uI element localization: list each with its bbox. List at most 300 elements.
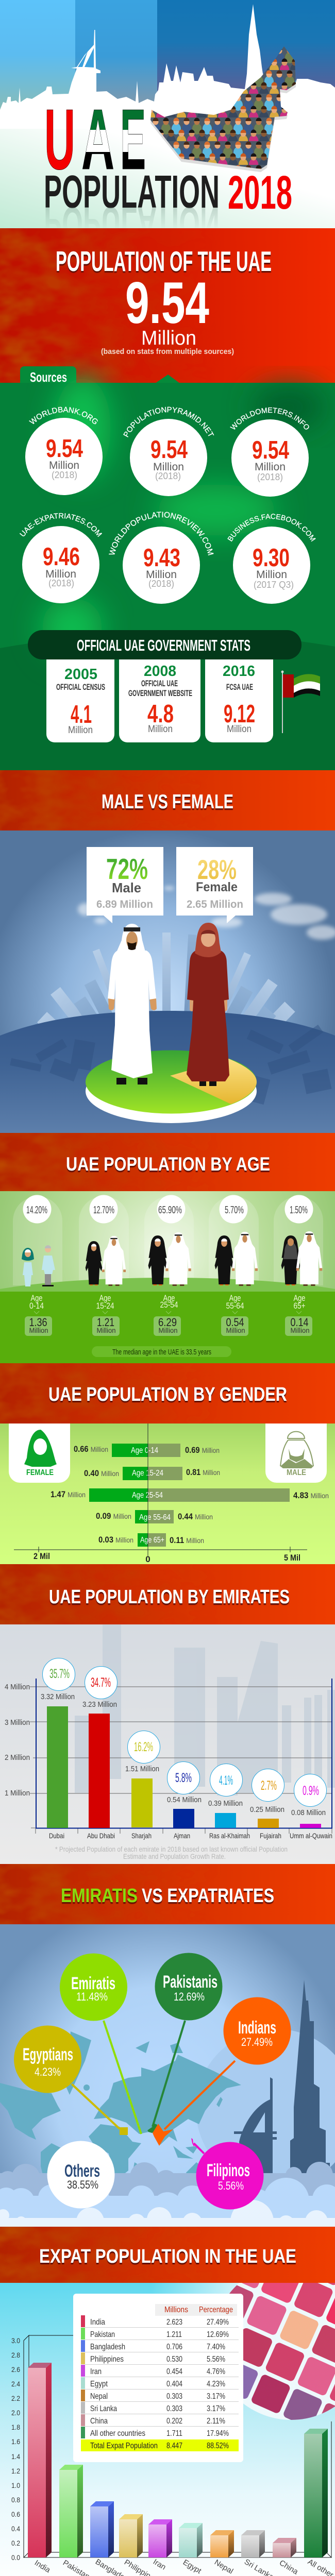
people: 65+: [281, 1231, 322, 1286]
male values: 4.83 Million: [293, 1490, 329, 1500]
sky colour columns: [0, 0, 335, 110]
sources label: Sources: [30, 369, 67, 385]
source populationpyramid.net: 9.54: [150, 436, 188, 464]
table text: 17.94%: [207, 2429, 229, 2438]
age 25-54: 6.29: [158, 1316, 177, 1329]
hero banner: E: [120, 92, 146, 188]
value labels: 0.25 Million: [250, 1806, 284, 1814]
source worldometers.info: 9.54: [252, 436, 289, 464]
card 2005: Million: [68, 725, 93, 736]
percent labels: 5.8%: [175, 1771, 192, 1785]
female values: 1.47 Million: [51, 1489, 86, 1499]
icon: UAE flag: [281, 671, 320, 733]
title: POPULATION 2018: 2018: [228, 166, 292, 219]
female values: 0.09 Million: [96, 1511, 131, 1521]
source uae-expatriates.com: [20, 513, 102, 603]
source worldpopulationreview.com: (2018): [148, 579, 174, 589]
age 25-54: Age: [163, 1293, 175, 1303]
table text: Egypt: [90, 2380, 108, 2388]
value labels: [41, 1693, 326, 1817]
header: population by gender: [0, 1363, 335, 1423]
sources tab: [20, 366, 76, 384]
source business.facebook.com: (2017 Q3): [254, 580, 294, 590]
note: (based on stats from multiple sources): [101, 347, 234, 356]
male values: 0.81 Million: [186, 1467, 220, 1477]
bubble: Emiratis: 11.48%: [76, 1990, 108, 2003]
age 15-24: [92, 1293, 120, 1336]
table text: 27.49%: [207, 2318, 229, 2327]
percent bubbles: 14.20%: [26, 1205, 47, 1216]
footnote: [55, 1845, 288, 1860]
age 55-64: [221, 1293, 248, 1336]
percent labels: 0.9%: [303, 1784, 319, 1798]
table text: 0.404: [166, 2380, 182, 2388]
x-axis labels: India: [33, 2558, 52, 2575]
age 55-64: Million: [226, 1326, 245, 1334]
table text: 12.69%: [207, 2330, 229, 2339]
axis labels: 2 Mil: [34, 1551, 50, 1561]
emirate names: Ras al-Khaimah: [209, 1832, 250, 1840]
pointer: [155, 375, 180, 383]
callout: female: [176, 847, 253, 923]
axis labels: 5 Mil: [284, 1553, 300, 1563]
source uae-expatriates.com: Million: [45, 568, 76, 580]
population pyramid bars: [89, 1444, 290, 1547]
source business.facebook.com: BUSINESS.FACEBOOK.COM: [227, 514, 316, 542]
panel: expat population: [0, 2283, 335, 2576]
age 15-24: Million: [97, 1326, 115, 1334]
header: population by emirates: [0, 1564, 335, 1624]
y-axis labels: 1.8: [11, 2423, 20, 2431]
y-axis labels: 3.0: [11, 2336, 20, 2345]
bubble: Others: [47, 2141, 114, 2208]
age 65+: 65+: [294, 1301, 306, 1311]
female values: [51, 1444, 133, 1545]
panel: total population: [0, 228, 335, 383]
y-axis labels: 2.4: [11, 2380, 20, 2388]
emirate names: Dubai: [49, 1832, 64, 1840]
bubble: Egyptians: 4.23%: [35, 2065, 61, 2078]
table text: 2.623: [166, 2318, 182, 2327]
female card: FEMALE: [26, 1468, 54, 1477]
percent bubbles: 1.50%: [290, 1205, 308, 1216]
axis labels: [34, 1551, 300, 1564]
card 2008: [119, 659, 200, 742]
panel: population by gender: [0, 1423, 335, 1564]
percent bubbles: 5.70%: [225, 1205, 244, 1216]
male values: 0.11 Million: [170, 1535, 204, 1545]
y-axis labels: [5, 1683, 30, 1798]
header: population by age: [0, 1133, 335, 1191]
world map: [0, 2031, 241, 2200]
green background: [0, 376, 335, 770]
table text: 5.56%: [207, 2355, 225, 2364]
source populationpyramid.net: (2018): [155, 471, 181, 481]
y-axis labels: 1.0: [11, 2481, 20, 2489]
source worldpopulationreview.com: WORLDPOPULATIONREVIEW.COM: [109, 512, 213, 555]
unit: Million: [141, 327, 196, 349]
table text: 0.530: [166, 2355, 182, 2364]
callout: male: Male: [112, 880, 141, 895]
age 65+: [285, 1293, 312, 1336]
bubble: Filipinos: 5.56%: [218, 2179, 244, 2192]
card 2008: 4.8: [147, 700, 174, 728]
y-axis labels: 2 Million: [5, 1754, 30, 1762]
age labels on bars: Age 0-14: [131, 1446, 158, 1455]
3D bar Egypt: [179, 2523, 203, 2557]
card 2005: 2005: [64, 666, 97, 683]
bubble: Emiratis: [60, 1954, 127, 2021]
3D bar Philippines: [119, 2514, 143, 2557]
table text: 3.17%: [207, 2404, 225, 2413]
card 2016: Million: [227, 724, 252, 735]
source populationpyramid.net: Million: [153, 461, 184, 473]
age 0-14: 1.36: [29, 1316, 47, 1329]
callout: female: 28%: [197, 855, 237, 885]
panel: sources: [0, 357, 335, 770]
age 65+: Age: [294, 1293, 305, 1303]
age 15-24: Age: [99, 1293, 111, 1303]
header: emiratis vs expatriates: [0, 1864, 335, 1924]
y-axis labels: 0.8: [11, 2496, 20, 2504]
highlighted countries: [120, 2124, 195, 2146]
y-axis labels: 0.2: [11, 2539, 20, 2547]
axis labels: 0: [145, 1554, 150, 1564]
percent bubbles: 65.90%: [158, 1205, 182, 1216]
age 0-14: Million: [29, 1326, 48, 1334]
percent labels: 4.1%: [219, 1773, 233, 1788]
value labels: 1.51 Million: [125, 1765, 159, 1773]
card 2016: [205, 659, 273, 742]
table swatches: [81, 2315, 85, 2438]
table card: [73, 2294, 243, 2462]
table text: 88.52%: [207, 2442, 229, 2450]
source business.facebook.com: [227, 514, 316, 604]
source worldbank.org: Million: [49, 460, 79, 471]
source uae-expatriates.com: UAE-EXPATRIATES.COM: [20, 513, 102, 537]
people: 55-64: [215, 1232, 258, 1286]
header: population by age: UAE POPULATION BY AGE: [66, 1154, 270, 1175]
bubble: Egyptians: [14, 2026, 81, 2093]
government stats heading: [28, 630, 301, 659]
age labels on bars: [131, 1446, 171, 1545]
source worldpopulationreview.com: Million: [146, 569, 177, 581]
table text: 7.40%: [207, 2343, 225, 2351]
table text: 1.211: [166, 2330, 182, 2339]
percent labels: 16.2%: [134, 1740, 153, 1754]
source business.facebook.com: Million: [256, 569, 287, 581]
source worldometers.info: [230, 407, 309, 497]
female values: 0.40 Million: [84, 1468, 119, 1478]
age 25-54: Million: [159, 1326, 177, 1334]
callout: male: 72%: [106, 853, 148, 886]
percent bubbles: [23, 1195, 313, 1223]
age 0-14: 0-14: [29, 1301, 44, 1311]
chart box lines: [24, 2335, 331, 2557]
percent labels: 2.7%: [261, 1778, 277, 1793]
table text: 1.711: [166, 2429, 182, 2438]
people: 15-24: [86, 1236, 126, 1286]
age 25-54: 25-54: [160, 1300, 178, 1310]
source uae-expatriates.com: 9.46: [43, 543, 80, 571]
green data band: [0, 1292, 335, 1363]
table text: Sri Lanka: [90, 2404, 117, 2413]
axis: [14, 1423, 307, 1556]
source worldbank.org: WORLDBANK.ORG: [29, 407, 98, 425]
table header: [155, 2304, 237, 2316]
bubble: Others: Others: [64, 2161, 100, 2181]
y-axis labels: 1 Million: [5, 1789, 30, 1798]
footnote: Estimate and Population Growth Rate.: [123, 1852, 226, 1860]
callout: male: 6.89 Million: [96, 899, 153, 910]
male card: [265, 1423, 327, 1483]
people: 25-54: [148, 1232, 191, 1286]
female values: 0.03 Million: [98, 1535, 133, 1545]
age 65+: 0.14: [291, 1316, 308, 1329]
age labels on bars: Age 55-64: [139, 1513, 171, 1522]
source uae-expatriates.com: (2018): [48, 578, 74, 588]
bubble: Indians: 27.49%: [241, 2036, 273, 2048]
panel: male vs female: [0, 831, 335, 1141]
value labels: 3.23 Million: [82, 1701, 117, 1709]
table text: 0.303: [166, 2392, 182, 2401]
value labels: 0.54 Million: [167, 1796, 202, 1804]
card 2016: 9.12: [224, 700, 255, 728]
y-axis labels: 0.0: [11, 2553, 20, 2562]
y-axis labels: 2.2: [11, 2394, 20, 2402]
title: UAE: U: [44, 92, 75, 188]
people: children: [22, 1245, 55, 1286]
age 15-24: 15-24: [96, 1301, 114, 1311]
age 55-64: 0.54: [226, 1316, 244, 1329]
clouds front: [0, 2200, 335, 2243]
ground: [0, 1278, 335, 1292]
mint floor gradient: [0, 129, 335, 228]
table text: All other countries: [90, 2429, 145, 2438]
table header: Millions: [164, 2306, 188, 2314]
3D bar Iran: [148, 2519, 172, 2557]
source worldometers.info: Million: [255, 461, 286, 473]
median age note: [92, 1346, 231, 1357]
y-axis labels: 2.6: [11, 2365, 20, 2374]
chart frame and gridlines: [30, 1679, 332, 1834]
male card: MALE: [287, 1468, 306, 1477]
value labels: 0.39 Million: [208, 1800, 243, 1808]
x-axis labels: Egypt: [181, 2558, 203, 2576]
table text: 0.706: [166, 2343, 182, 2351]
Dubai skyline silhouette: [0, 4, 335, 155]
bubble: Others: 38.55%: [67, 2178, 98, 2191]
female values: 0.66 Million: [74, 1444, 108, 1454]
source worldpopulationreview.com: 9.43: [143, 544, 180, 572]
3D bar all other: [304, 2429, 328, 2557]
table text: 0.454: [166, 2367, 182, 2376]
table text: Bangladesh: [90, 2343, 125, 2351]
table text: India: [90, 2318, 105, 2327]
source populationpyramid.net: POPULATIONPYRAMID.NET: [123, 407, 214, 437]
3D bar Sri Lanka: [241, 2530, 265, 2557]
age 55-64: Age: [229, 1293, 241, 1303]
card 2016: FCSA UAE: [226, 682, 253, 692]
arches: [13, 1196, 323, 1285]
table text: Nepal: [90, 2392, 108, 2401]
source populationpyramid.net: [123, 407, 214, 496]
source worldpopulationreview.com: [109, 512, 213, 604]
header: male vs female: [0, 770, 335, 831]
large circle behind towers: [196, 2029, 335, 2189]
callout: female: 2.65 Million: [187, 899, 243, 910]
clouds middle: [0, 2178, 335, 2227]
table text: 4.23%: [207, 2380, 225, 2388]
age 25-54: [154, 1293, 181, 1336]
callout: female: Female: [196, 880, 238, 894]
sail cut-out of Burj Al Arab: [78, 48, 94, 67]
card 2008: Million: [148, 724, 173, 735]
3D bar India: [28, 2363, 52, 2557]
y-axis labels: 0.6: [11, 2510, 20, 2518]
y-axis labels: 3 Million: [5, 1719, 30, 1727]
bubble: Emiratis: Emiratis: [71, 1974, 115, 1993]
table text: 0.303: [166, 2404, 182, 2413]
table text: 0.202: [166, 2417, 182, 2426]
male values: [170, 1445, 329, 1545]
source worldometers.info: WORLDOMETERS.INFO: [230, 407, 309, 430]
figure: man: [108, 924, 157, 1084]
table total band: [81, 2439, 239, 2451]
y-axis labels: 0.4: [11, 2524, 20, 2533]
3D bar Bangladesh: [90, 2501, 114, 2557]
card 2016: 2016: [223, 663, 255, 680]
table text: 8.447: [166, 2442, 182, 2450]
bubble: Indians: Indians: [238, 2018, 276, 2038]
source worldbank.org: (2018): [52, 470, 77, 480]
emirate names: Fujairah: [260, 1832, 281, 1840]
card 2008: GOVERNMENT WEBSITE: [128, 688, 192, 698]
panel: population by age: [0, 1191, 335, 1363]
source worldbank.org: [25, 407, 103, 495]
figure: woman: [187, 923, 229, 1086]
value labels: 0.08 Million: [291, 1809, 326, 1817]
y-axis labels: 4 Million: [5, 1683, 30, 1691]
y-axis labels: 1.6: [11, 2437, 20, 2446]
icon: globe of tiles: [229, 2283, 335, 2420]
panel: population by emirates: [0, 1624, 335, 1864]
leader lines: [72, 2021, 235, 2154]
planet: [0, 1011, 335, 1133]
3D bar Nepal: [210, 2530, 234, 2557]
table text: 2.11%: [207, 2417, 225, 2426]
pie chart 72 / 28: [86, 1050, 257, 1123]
table text: Total Expat Population: [90, 2442, 158, 2450]
card 2005: [46, 659, 114, 742]
age 55-64: 55-64: [226, 1301, 244, 1311]
emirate names: Sharjah: [131, 1832, 152, 1840]
header: emiratis vs expatriates: VS EXPATRIATES: [142, 1885, 274, 1907]
big number: 9.54: [125, 270, 209, 336]
percent labels: [49, 1667, 319, 1798]
card 2005: OFFICIAL CENSUS: [56, 682, 105, 692]
header: male vs female: MALE VS FEMALE: [102, 791, 233, 813]
bubble: Pakistanis: [155, 1953, 223, 2021]
median age note: The median age in the UAE is 33.5 years: [112, 1348, 211, 1357]
header: emiratis vs expatriates: EMIRATIS: [61, 1885, 138, 1907]
table text: Pakistan: [90, 2330, 115, 2339]
female card: [9, 1423, 70, 1483]
emirate names: [49, 1832, 332, 1840]
callout: male: [87, 847, 163, 923]
age labels on bars: Age 15-24: [132, 1469, 163, 1478]
percent bubbles: [42, 1658, 327, 1806]
x-axis labels: Nepal: [213, 2558, 234, 2576]
x-axis labels: [33, 2557, 335, 2576]
reflected building texture: [10, 1025, 332, 1105]
source worldometers.info: (2018): [257, 472, 283, 482]
age 65+: Million: [291, 1326, 309, 1334]
Dubai towers silhouette: [234, 1980, 330, 2190]
table header: Percentage: [199, 2306, 233, 2314]
footnote: * Projected Population of each emirate in 2018 based on last known official Population: [55, 1845, 288, 1853]
bubble: Pakistanis: 12.69%: [174, 1990, 205, 2003]
y-axis labels: 1.4: [11, 2452, 20, 2461]
age labels on bars: Age 25-54: [132, 1491, 163, 1500]
male values: 0.44 Million: [178, 1512, 213, 1521]
male values: 0.69 Million: [185, 1445, 220, 1455]
bars: [47, 1706, 321, 1828]
UAE map filled with crowd: [150, 46, 296, 172]
table text: 4.76%: [207, 2367, 225, 2376]
source business.facebook.com: 9.30: [253, 544, 290, 572]
x-axis labels: Iran: [152, 2557, 167, 2572]
clouds back: [0, 2162, 335, 2204]
age 0-14: [25, 1293, 52, 1336]
table text: Philippines: [90, 2355, 124, 2364]
title: UAE: A: [81, 92, 114, 188]
age 0-14: Age: [31, 1293, 42, 1303]
y-axis labels: 2.8: [11, 2351, 20, 2359]
card 2008: 2008: [144, 663, 176, 680]
table text: Iran: [90, 2367, 102, 2376]
card 2005: 4.1: [71, 701, 92, 728]
table text: China: [90, 2417, 108, 2426]
faded towers backdrop: [75, 1624, 335, 1795]
3D bar China: [273, 2538, 296, 2557]
emirate names: Ajman: [174, 1832, 190, 1840]
card 2008: OFFICIAL UAE: [141, 679, 178, 688]
title: UAE: [44, 92, 146, 188]
bubble: Pakistanis: Pakistanis: [163, 1972, 217, 1992]
percent labels: 34.7%: [91, 1675, 111, 1690]
city skyline on planet: [27, 933, 321, 1141]
header: expat population: [0, 2227, 335, 2283]
y-axis labels: 2.0: [11, 2409, 20, 2417]
age labels on bars: Age 65+: [140, 1536, 164, 1545]
y-axis labels: 1.2: [11, 2467, 20, 2475]
panel: world map of nationalities: [0, 1924, 335, 2243]
bubble: Filipinos: Filipinos: [207, 2161, 250, 2180]
hero banner: [0, 0, 335, 249]
age 15-24: 1.21: [97, 1316, 114, 1329]
value labels: 3.32 Million: [41, 1693, 75, 1701]
bubble: Indians: [224, 1997, 291, 2065]
percent labels: 35.7%: [49, 1667, 70, 1681]
x-axis labels: China: [278, 2558, 300, 2576]
table text: [90, 2318, 229, 2450]
percent bubbles: 12.70%: [93, 1205, 114, 1216]
table rule lines: [85, 2328, 239, 2427]
table text: 3.17%: [207, 2392, 225, 2401]
header: population by gender: UAE POPULATION BY GENDER: [48, 1384, 287, 1405]
3D bar Pakistan: [59, 2465, 83, 2557]
